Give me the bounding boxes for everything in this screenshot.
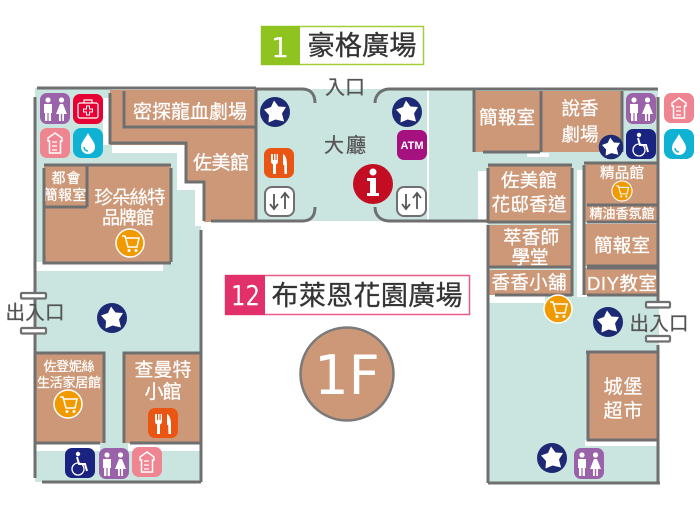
room: 香香小舖: 香香小舖 <box>492 272 566 293</box>
room: 簡報室 top: 簡報室 <box>479 107 535 128</box>
icon: star left wing <box>97 303 127 333</box>
label: 密探龍血劇場: 密探龍血劇場 <box>133 101 247 123</box>
icon: cart 香香小舖 <box>544 295 572 323</box>
room: 簡報室 top <box>475 91 540 152</box>
floor badge: 1F: 1F <box>314 344 380 407</box>
room: 佐美館花邸香道: 花邸香道 <box>492 194 566 215</box>
icon: star lobby left <box>260 97 290 127</box>
icon: elevator right <box>397 187 426 216</box>
icon: restaurant <box>148 408 178 438</box>
room: 珍朵絲特品牌館: 珍朵絲特 <box>94 187 166 208</box>
title: 豪格廣場: 豪格廣場 <box>308 31 416 61</box>
room: 佐美館花邸香道: 佐美館 <box>501 170 557 191</box>
room: 都會簡報室: 都會 <box>52 170 80 186</box>
room: 佐登妮絲生活家居館: 生活家居館 <box>37 375 101 390</box>
icon: accessible lower left <box>65 448 95 478</box>
room: 城堡超市 <box>588 352 658 440</box>
walls <box>35 88 660 483</box>
room: 查曼特小館: 小館 <box>144 381 182 403</box>
room: 佐美館花邸香道 <box>488 165 572 221</box>
icon: restaurant lobby <box>264 148 294 178</box>
title: 豪格廣場: 1 <box>271 31 289 64</box>
floor background: left wing <box>35 88 201 482</box>
room: 城堡超市: 超市 <box>604 400 642 422</box>
icon: information <box>353 164 393 204</box>
icon: star lower right <box>537 443 567 473</box>
room: 精油香氛館: 精油香氛館 <box>590 206 654 221</box>
room: 都會簡報室: 簡報室 <box>44 187 86 203</box>
icon: cart 精品館 <box>612 181 632 201</box>
room: 城堡超市: 城堡 <box>604 376 642 398</box>
title: 布萊恩花園廣場: 布萊恩花園廣場 <box>272 281 462 311</box>
label: 大廳: 大廳 <box>324 134 366 157</box>
room: 簡報室 right <box>585 224 658 266</box>
room: 說香劇場 <box>541 91 622 152</box>
label: right 出入口: 出入口 <box>630 313 688 335</box>
title: 豪格廣場 <box>261 26 424 65</box>
title: 布萊恩花園廣場: 12 <box>231 279 260 312</box>
door: right entrance <box>646 302 670 342</box>
icon: first aid <box>73 94 103 124</box>
rooms: upper left block <box>110 90 256 222</box>
icon: water upper left <box>73 128 103 158</box>
floor background: lobby and right wing <box>257 89 659 483</box>
room: 萃香師學堂: 學堂 <box>512 247 548 268</box>
label: 入口: 入口 <box>325 77 365 99</box>
icon: star right entrance <box>593 307 623 337</box>
room: DIY教室: DIY教室 <box>587 273 657 294</box>
room: 佐登妮絲生活家居館: 佐登妮絲 <box>44 359 94 374</box>
door: left entrance <box>21 293 46 334</box>
icon: star lobby right <box>392 97 422 127</box>
room: 都會簡報室 <box>44 165 88 207</box>
floor badge: 1F <box>300 328 394 420</box>
icon: water upper right <box>664 129 694 159</box>
icon: toilet upper right <box>626 93 656 124</box>
icon: ATM: ATM <box>400 140 424 152</box>
room: 萃香師學堂 <box>488 225 572 268</box>
icon: nursing room upper right <box>664 93 694 123</box>
room: 查曼特小館: 查曼特 <box>134 359 192 381</box>
icon: star 說香劇場 <box>599 135 623 159</box>
icon: nursing room upper left <box>40 128 70 158</box>
room: 精品館: 精品館 <box>600 165 644 182</box>
icon: toilet lower left <box>99 448 129 479</box>
title: 布萊恩花園廣場 <box>225 275 470 315</box>
room: 查曼特小館 <box>124 353 201 443</box>
icon: elevator left <box>265 187 294 216</box>
icon: cart <box>116 229 144 257</box>
icon: ATM <box>397 130 427 160</box>
icon: toilet upper left <box>40 93 70 124</box>
room: 佐登妮絲生活家居館 <box>36 353 104 443</box>
room: 簡報室 right: 簡報室 <box>594 235 650 256</box>
label: left 出入口: 出入口 <box>6 302 64 324</box>
room: 精品館 <box>585 163 658 205</box>
room: 珍朵絲特品牌館: 品牌館 <box>102 208 154 228</box>
room: 說香劇場: 說香 <box>562 98 598 119</box>
icon: nursing room lower left <box>132 447 162 477</box>
room: 珍朵絲特品牌館 <box>44 165 171 262</box>
icon: accessible upper right <box>626 129 656 159</box>
room: 說香劇場: 劇場 <box>562 124 598 145</box>
label: 佐美館: 佐美館 <box>193 152 249 174</box>
icon: cart <box>54 390 82 418</box>
room: 萃香師學堂: 萃香師 <box>503 227 559 248</box>
icon: toilet lower right <box>574 448 604 479</box>
